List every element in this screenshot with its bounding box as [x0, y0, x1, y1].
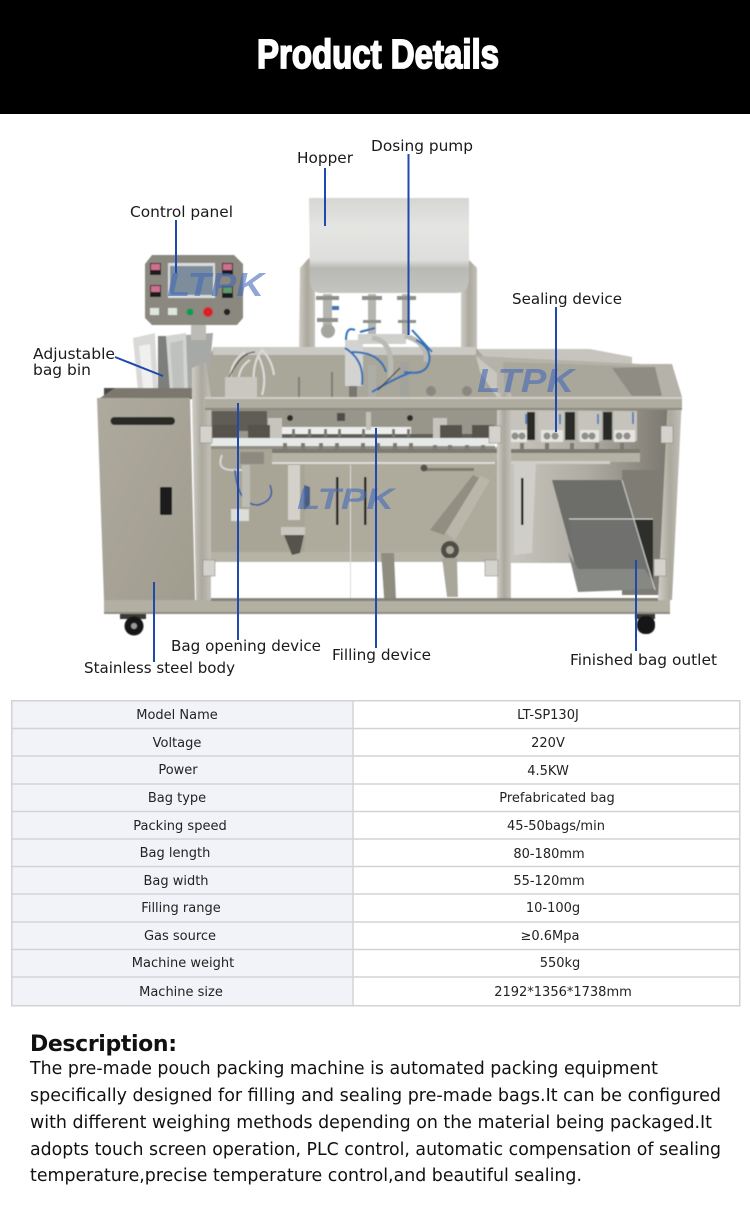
- row: gas source: Gas source: [144, 929, 216, 944]
- row: bag width: Bag width: [143, 874, 209, 889]
- label: hopper: Hopper: [297, 149, 354, 167]
- row: packing speed: Packing speed: [133, 819, 227, 834]
- title: Product Details: [257, 31, 499, 77]
- bag-opening lower assembly: [220, 452, 366, 555]
- right chamber: [510, 410, 668, 598]
- callout lines: [115, 154, 636, 662]
- right hood: [476, 356, 682, 397]
- row: machine weight: [132, 956, 580, 971]
- machine illustration: [97, 198, 682, 636]
- label: filling device: Filling device: [332, 646, 431, 664]
- rear lid: [476, 349, 632, 364]
- row: bag type: Bag type: [148, 791, 206, 806]
- row: power: 4.5KW: [527, 764, 569, 779]
- hopper: [309, 198, 469, 293]
- label: sealing device: Sealing device: [512, 290, 622, 308]
- row: packing speed: 45-50bags/min: [507, 819, 605, 834]
- row: voltage: 220V: [531, 736, 565, 751]
- casters: [120, 614, 655, 636]
- watermark: LTPK centre: LTPK: [297, 483, 397, 516]
- label: adjustable bag bin: [33, 345, 115, 379]
- row: machine size: Machine size: [139, 985, 223, 1000]
- row: bag width: 55-120mm: [513, 874, 585, 889]
- description text: with different weighing methods depending on the material being packaged.It: [30, 1112, 712, 1133]
- row: filling range: Filling range: [141, 901, 221, 916]
- row: bag length: Bag length: [140, 846, 210, 861]
- row: model name: Model Name: [136, 708, 218, 723]
- conveyor rail: [205, 438, 640, 464]
- label: adjustable bag bin: Adjustable: [33, 345, 115, 363]
- row: model name: [136, 708, 579, 723]
- row: power: [158, 763, 569, 779]
- linkage arm: [420, 464, 490, 559]
- row: machine size: [139, 985, 632, 1000]
- description text: temperature,precise temperature control,and beautiful sealing.: [30, 1165, 582, 1186]
- frame columns and top bar: [192, 362, 682, 600]
- main back plate: [210, 447, 498, 557]
- watermark: LTPK right: LTPK: [477, 362, 577, 399]
- row: voltage: Voltage: [153, 736, 201, 751]
- row: bag width: [143, 874, 585, 889]
- row: bag length: 80-180mm: [513, 847, 585, 862]
- description text: The pre-made pouch packing machine is automated packing equipment: [29, 1058, 658, 1079]
- row: machine weight: Machine weight: [132, 956, 234, 971]
- row: bag type: Prefabricated bag: [499, 791, 615, 806]
- row: packing speed: [133, 819, 605, 834]
- description text: adopts touch screen operation, PLC control, automatic compensation of sealing: [30, 1139, 721, 1160]
- row: model name: LT-SP130J: [517, 708, 579, 723]
- dosing pumps and air tubes: [298, 328, 472, 397]
- sealing units: [510, 411, 637, 442]
- label: stainless steel body: Stainless steel body: [84, 659, 235, 677]
- row: filling range: [141, 901, 580, 916]
- row: bag type: [148, 791, 615, 806]
- hopper supports: [299, 258, 477, 352]
- row: filling range: 10-100g: [526, 901, 580, 916]
- description text: [29, 1058, 721, 1186]
- row: voltage: [153, 736, 565, 751]
- label: adjustable bag bin: bag bin: [33, 361, 91, 379]
- specification table: [12, 701, 740, 1006]
- adjustable bag bin: [104, 333, 213, 399]
- control panel: [145, 255, 243, 340]
- row: power: Power: [158, 763, 198, 778]
- row: gas source: [144, 929, 580, 944]
- discharge chute: [552, 480, 657, 592]
- upper back plate: [205, 348, 497, 397]
- row: machine size: 2192*1356*1738mm: [494, 985, 632, 1000]
- hopper outlet valves: [316, 294, 416, 338]
- row: machine weight: 550kg: [540, 956, 580, 971]
- row: gas source: ≥0.6Mpa: [520, 929, 580, 944]
- wires and bag-opening block: [225, 350, 274, 397]
- centre mechanism area: [210, 410, 498, 444]
- white opening and legs: [211, 465, 498, 598]
- row: bag length: [140, 846, 585, 862]
- watermark: LTPK top: LTPK: [167, 266, 267, 303]
- description text: specifically designed for filling and sealing pre-made bags.It can be configured: [30, 1085, 721, 1106]
- label: control panel: Control panel: [130, 203, 233, 221]
- steel cabinet: [97, 388, 195, 600]
- title banner: [0, 0, 750, 114]
- description heading: Description:: [30, 1032, 177, 1057]
- label: bag opening device: Bag opening device: [171, 637, 321, 655]
- label: dosing pump: Dosing pump: [371, 137, 473, 155]
- base rail: [104, 598, 670, 614]
- label: finished bag outlet: Finished bag outlet: [570, 651, 717, 669]
